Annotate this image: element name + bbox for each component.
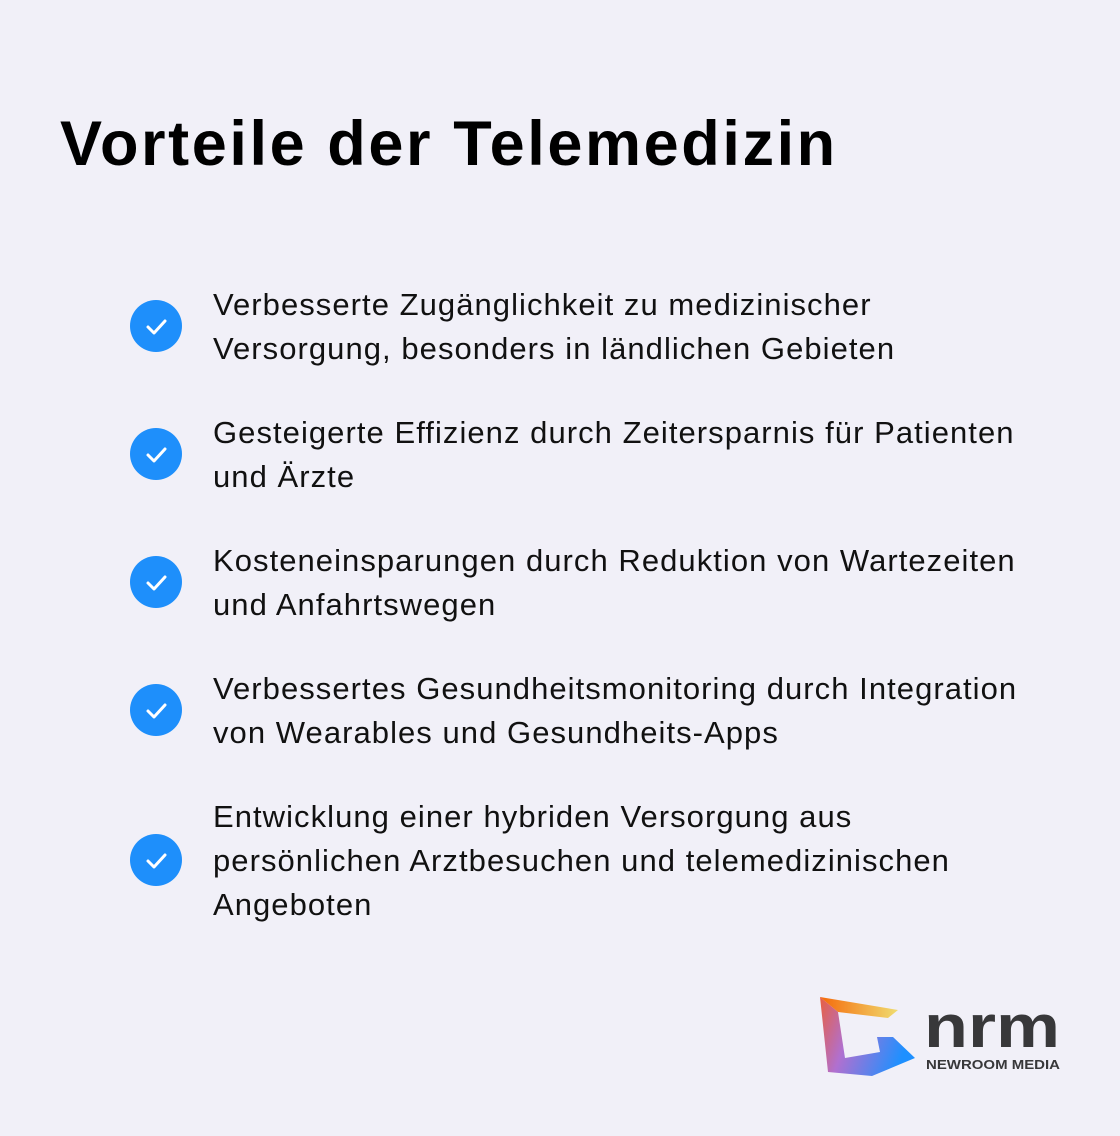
icon: check [130,834,182,886]
icon: check [130,300,182,352]
logo text: nrm [924,993,1060,1060]
text: von Wearables und Gesundheits-Apps [213,715,779,750]
text: Angeboten [213,887,372,922]
text [213,671,1017,750]
text [213,543,1016,622]
text: persönlichen Arztbesuchen und telemedizinischen [213,843,950,878]
text: Kosteneinsparungen durch Reduktion von Wartezeiten [213,543,1016,578]
text: Entwicklung einer hybriden Versorgung aus [213,799,852,834]
text [213,287,895,366]
text: und Anfahrtswegen [213,587,496,622]
item 1 [130,287,895,366]
icon: check [130,684,182,736]
title: Vorteile der Telemedizin [60,109,838,179]
item 4 [130,671,1017,750]
logo mark [820,997,915,1076]
item 3 [130,543,1016,622]
item 5 [130,799,950,922]
text [213,799,950,922]
logo text: NEWROOM MEDIA [926,1058,1060,1072]
text [213,415,1015,494]
text: und Ärzte [213,459,355,494]
icon: check [130,428,182,480]
icon: check [130,556,182,608]
text: Versorgung, besonders in ländlichen Gebieten [213,331,895,366]
item 2 [130,415,1015,494]
text: Verbessertes Gesundheitsmonitoring durch Integration [213,671,1017,706]
text: Verbesserte Zugänglichkeit zu medizinischer [213,287,872,322]
text: Gesteigerte Effizienz durch Zeitersparnis für Patienten [213,415,1015,450]
